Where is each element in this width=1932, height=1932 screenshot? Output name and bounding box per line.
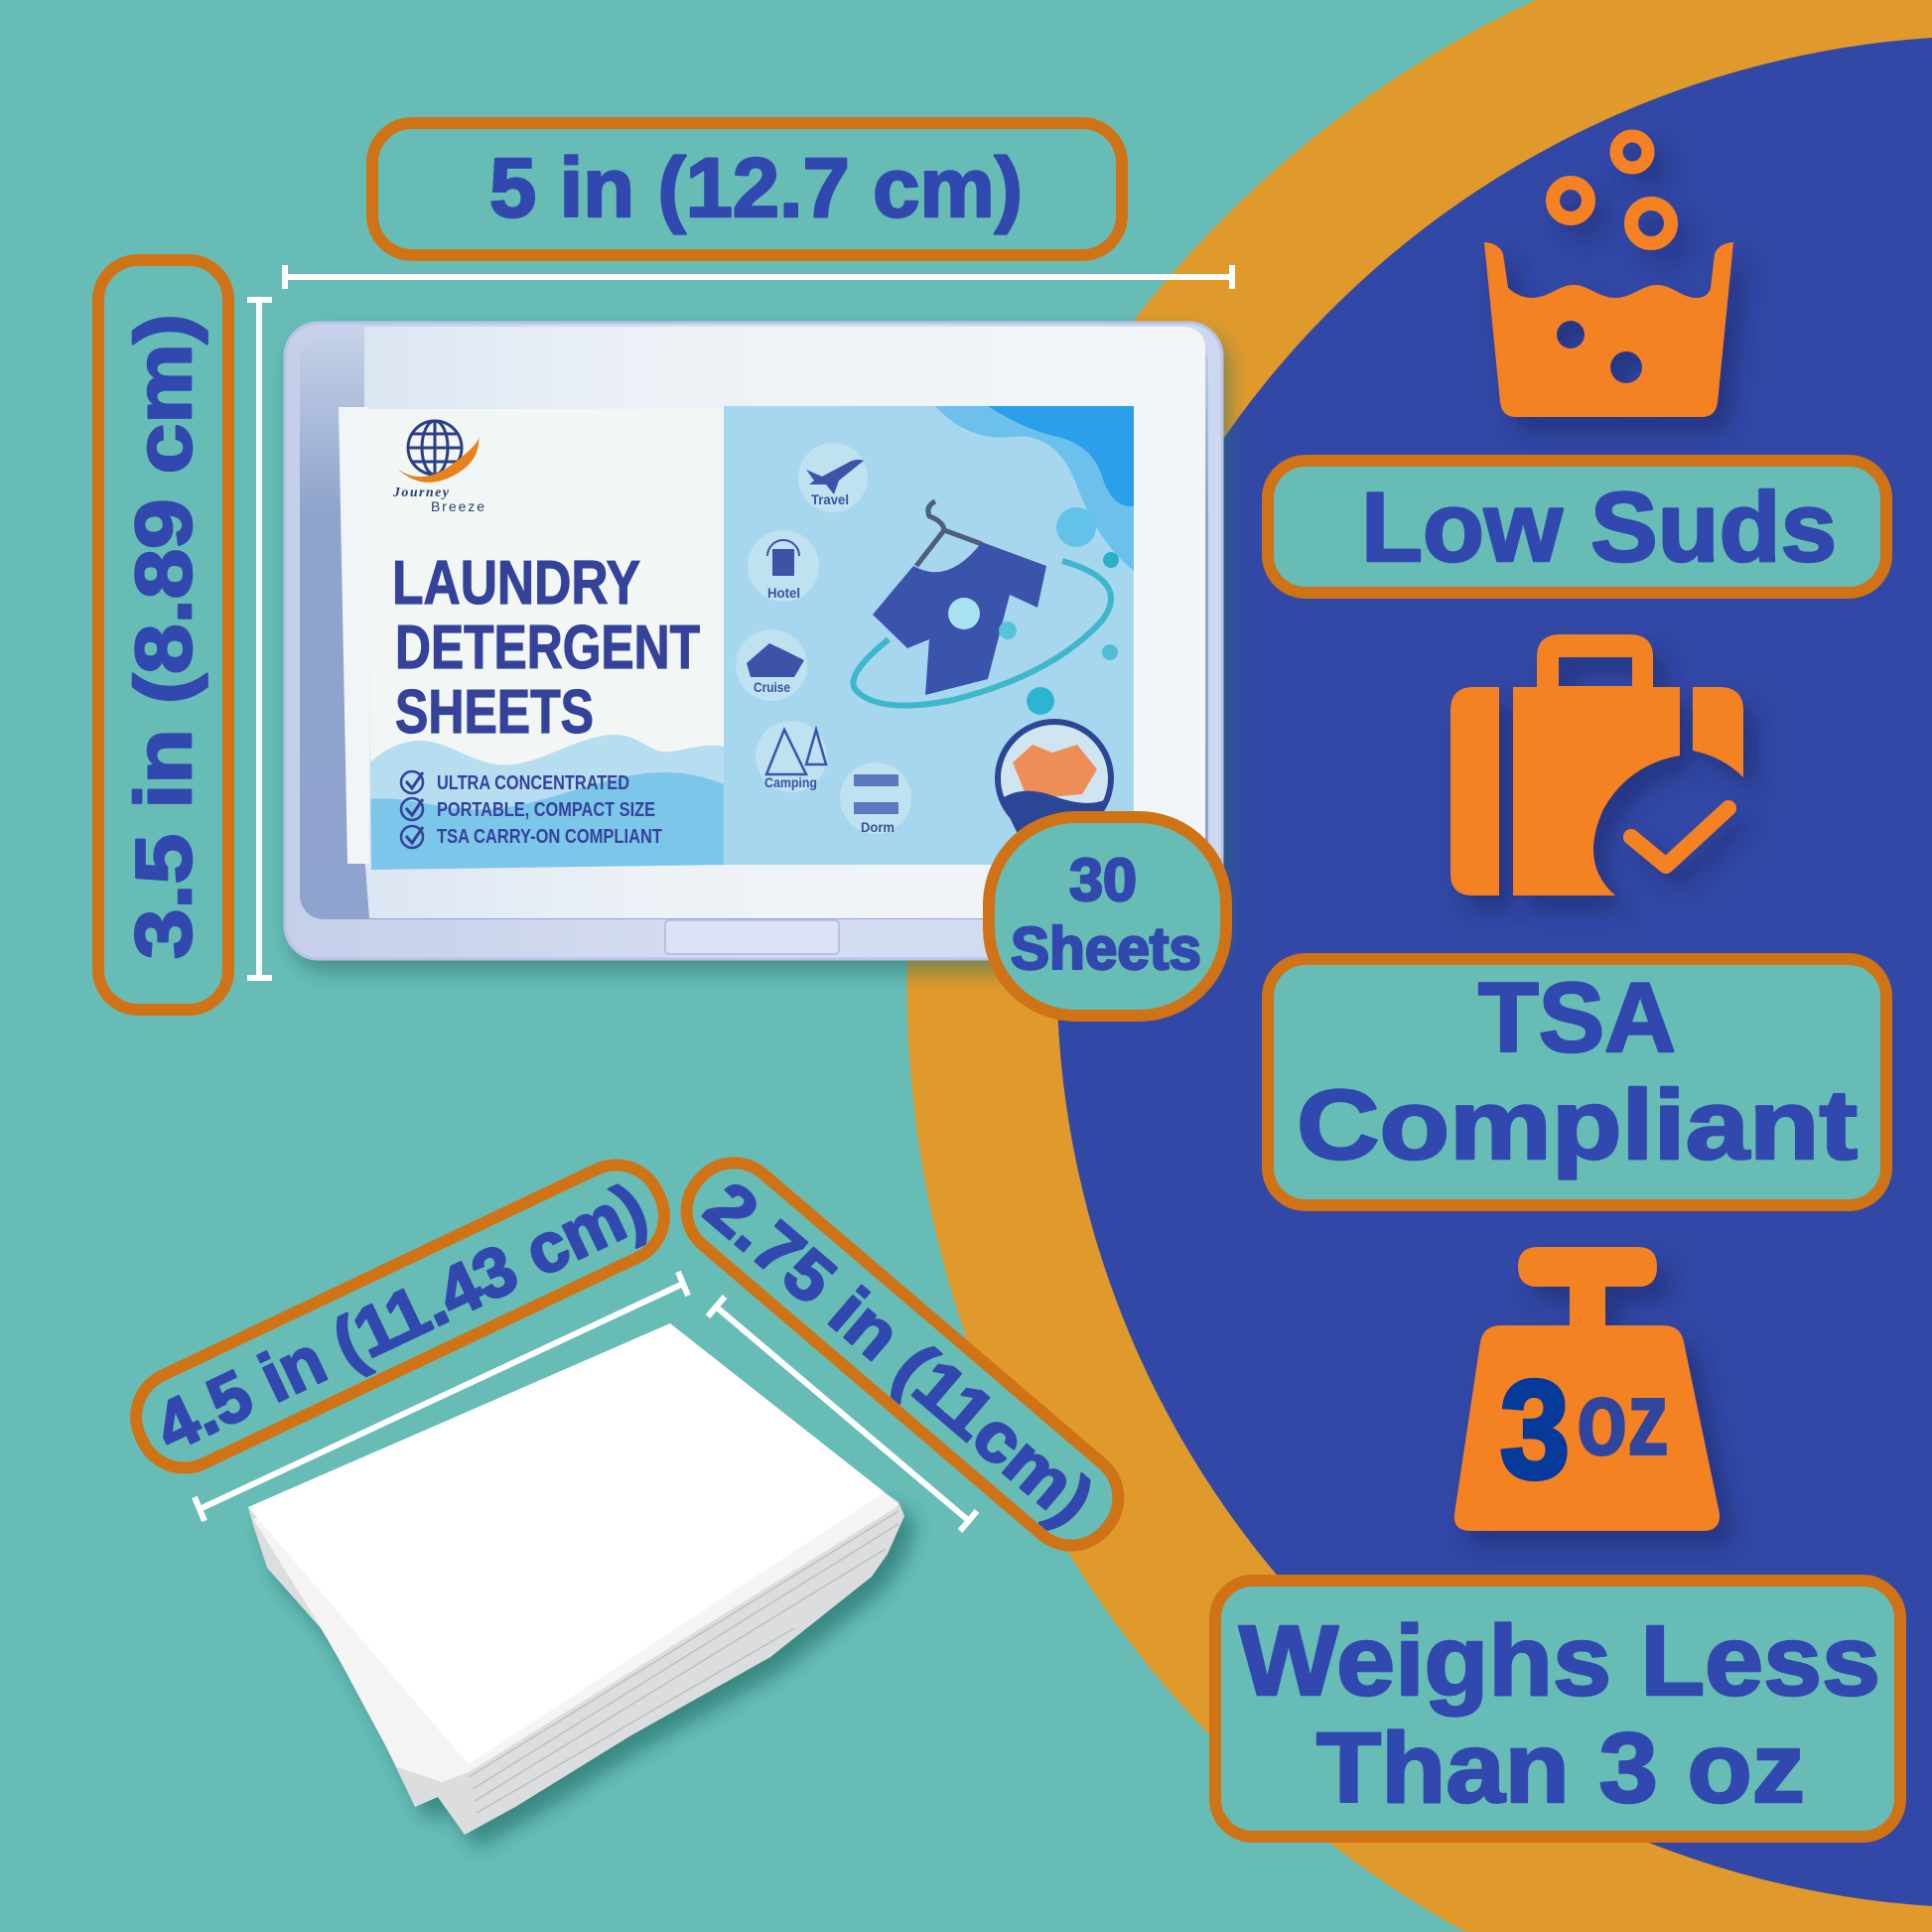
badge: 2.75 in: 2.75 in (11cm) <box>691 1167 1108 1539</box>
box shell <box>285 323 1222 959</box>
icon: camping: Camping <box>764 774 817 790</box>
label title: LAUNDRY <box>392 549 640 618</box>
label feature list: TSA CARRY-ON COMPLIANT <box>437 826 662 848</box>
icon: dorm: Dorm <box>861 819 895 835</box>
background arc: orange <box>907 0 1932 1932</box>
label feature list: ULTRA CONCENTRATED <box>437 772 629 794</box>
icon: suitcase with check <box>1450 634 1743 896</box>
package label: right <box>724 406 1134 865</box>
label: TSA compliant: Compliant <box>1297 1069 1858 1179</box>
icon: dorm <box>840 762 911 835</box>
label: low suds <box>1268 461 1886 593</box>
label title: DETERGENT <box>395 614 700 682</box>
icon: 3 oz weight: oz <box>1577 1360 1669 1477</box>
ruler: sheet width <box>708 1297 977 1531</box>
package label: left <box>362 402 730 879</box>
badge: 30 sheets <box>989 817 1226 1016</box>
label: TSA compliant: TSA <box>1478 962 1676 1072</box>
height badge: 3.5 in: 3.5 in (8.89 cm) <box>119 314 207 959</box>
height ruler <box>247 300 272 978</box>
ruler: sheet length <box>195 1272 688 1521</box>
width ruler <box>285 265 1232 289</box>
label: TSA compliant <box>1268 959 1886 1205</box>
logo: globe with swoosh: Journey <box>392 485 450 500</box>
label: weighs less than 3 oz <box>1215 1581 1900 1837</box>
icon: cruise <box>736 629 807 701</box>
label title <box>392 549 700 747</box>
product box <box>285 323 1222 959</box>
logo: globe with swoosh <box>392 421 484 514</box>
icon: 3 oz weight <box>1454 1247 1720 1531</box>
top sheet <box>248 1323 885 1764</box>
label feature list: PORTABLE, COMPACT SIZE <box>437 799 655 821</box>
label: low suds: Low Suds <box>1361 472 1837 582</box>
icon: hotel <box>748 530 819 602</box>
badge: 30 sheets: Sheets <box>1011 915 1201 982</box>
badge: 30 sheets: 30 <box>1069 847 1137 913</box>
icon: hotel: Hotel <box>767 585 800 601</box>
label: weighs less than 3 oz: Than 3 oz <box>1316 1713 1805 1824</box>
box clasp <box>665 920 839 954</box>
icon: cruise: Cruise <box>754 679 790 695</box>
label: weighs less than 3 oz: Weighs Less <box>1239 1605 1880 1717</box>
sheets inside box <box>364 327 1205 918</box>
icon: 3 oz weight: 3 <box>1500 1351 1570 1507</box>
sheet stack <box>248 1323 904 1835</box>
usage icons <box>736 443 911 835</box>
height badge: 3.5 in <box>98 260 228 1010</box>
icon: travel <box>798 443 868 512</box>
background arc: blue <box>1056 38 1932 1906</box>
badge: 4.5 in: 4.5 in (11.43 cm) <box>144 1169 657 1466</box>
label title: SHEETS <box>395 678 594 747</box>
icon: camping <box>756 721 827 792</box>
icon: travel: Travel <box>811 491 849 507</box>
icon: low suds basin <box>1484 136 1733 417</box>
width badge: 5 in: 5 in (12.7 cm) <box>489 141 1023 234</box>
label illustration: shirt on hanger <box>853 501 1119 715</box>
width badge: 5 in <box>372 123 1122 255</box>
logo: globe with swoosh: Breeze <box>431 498 484 514</box>
label seal <box>998 722 1111 835</box>
label feature list <box>401 771 662 848</box>
